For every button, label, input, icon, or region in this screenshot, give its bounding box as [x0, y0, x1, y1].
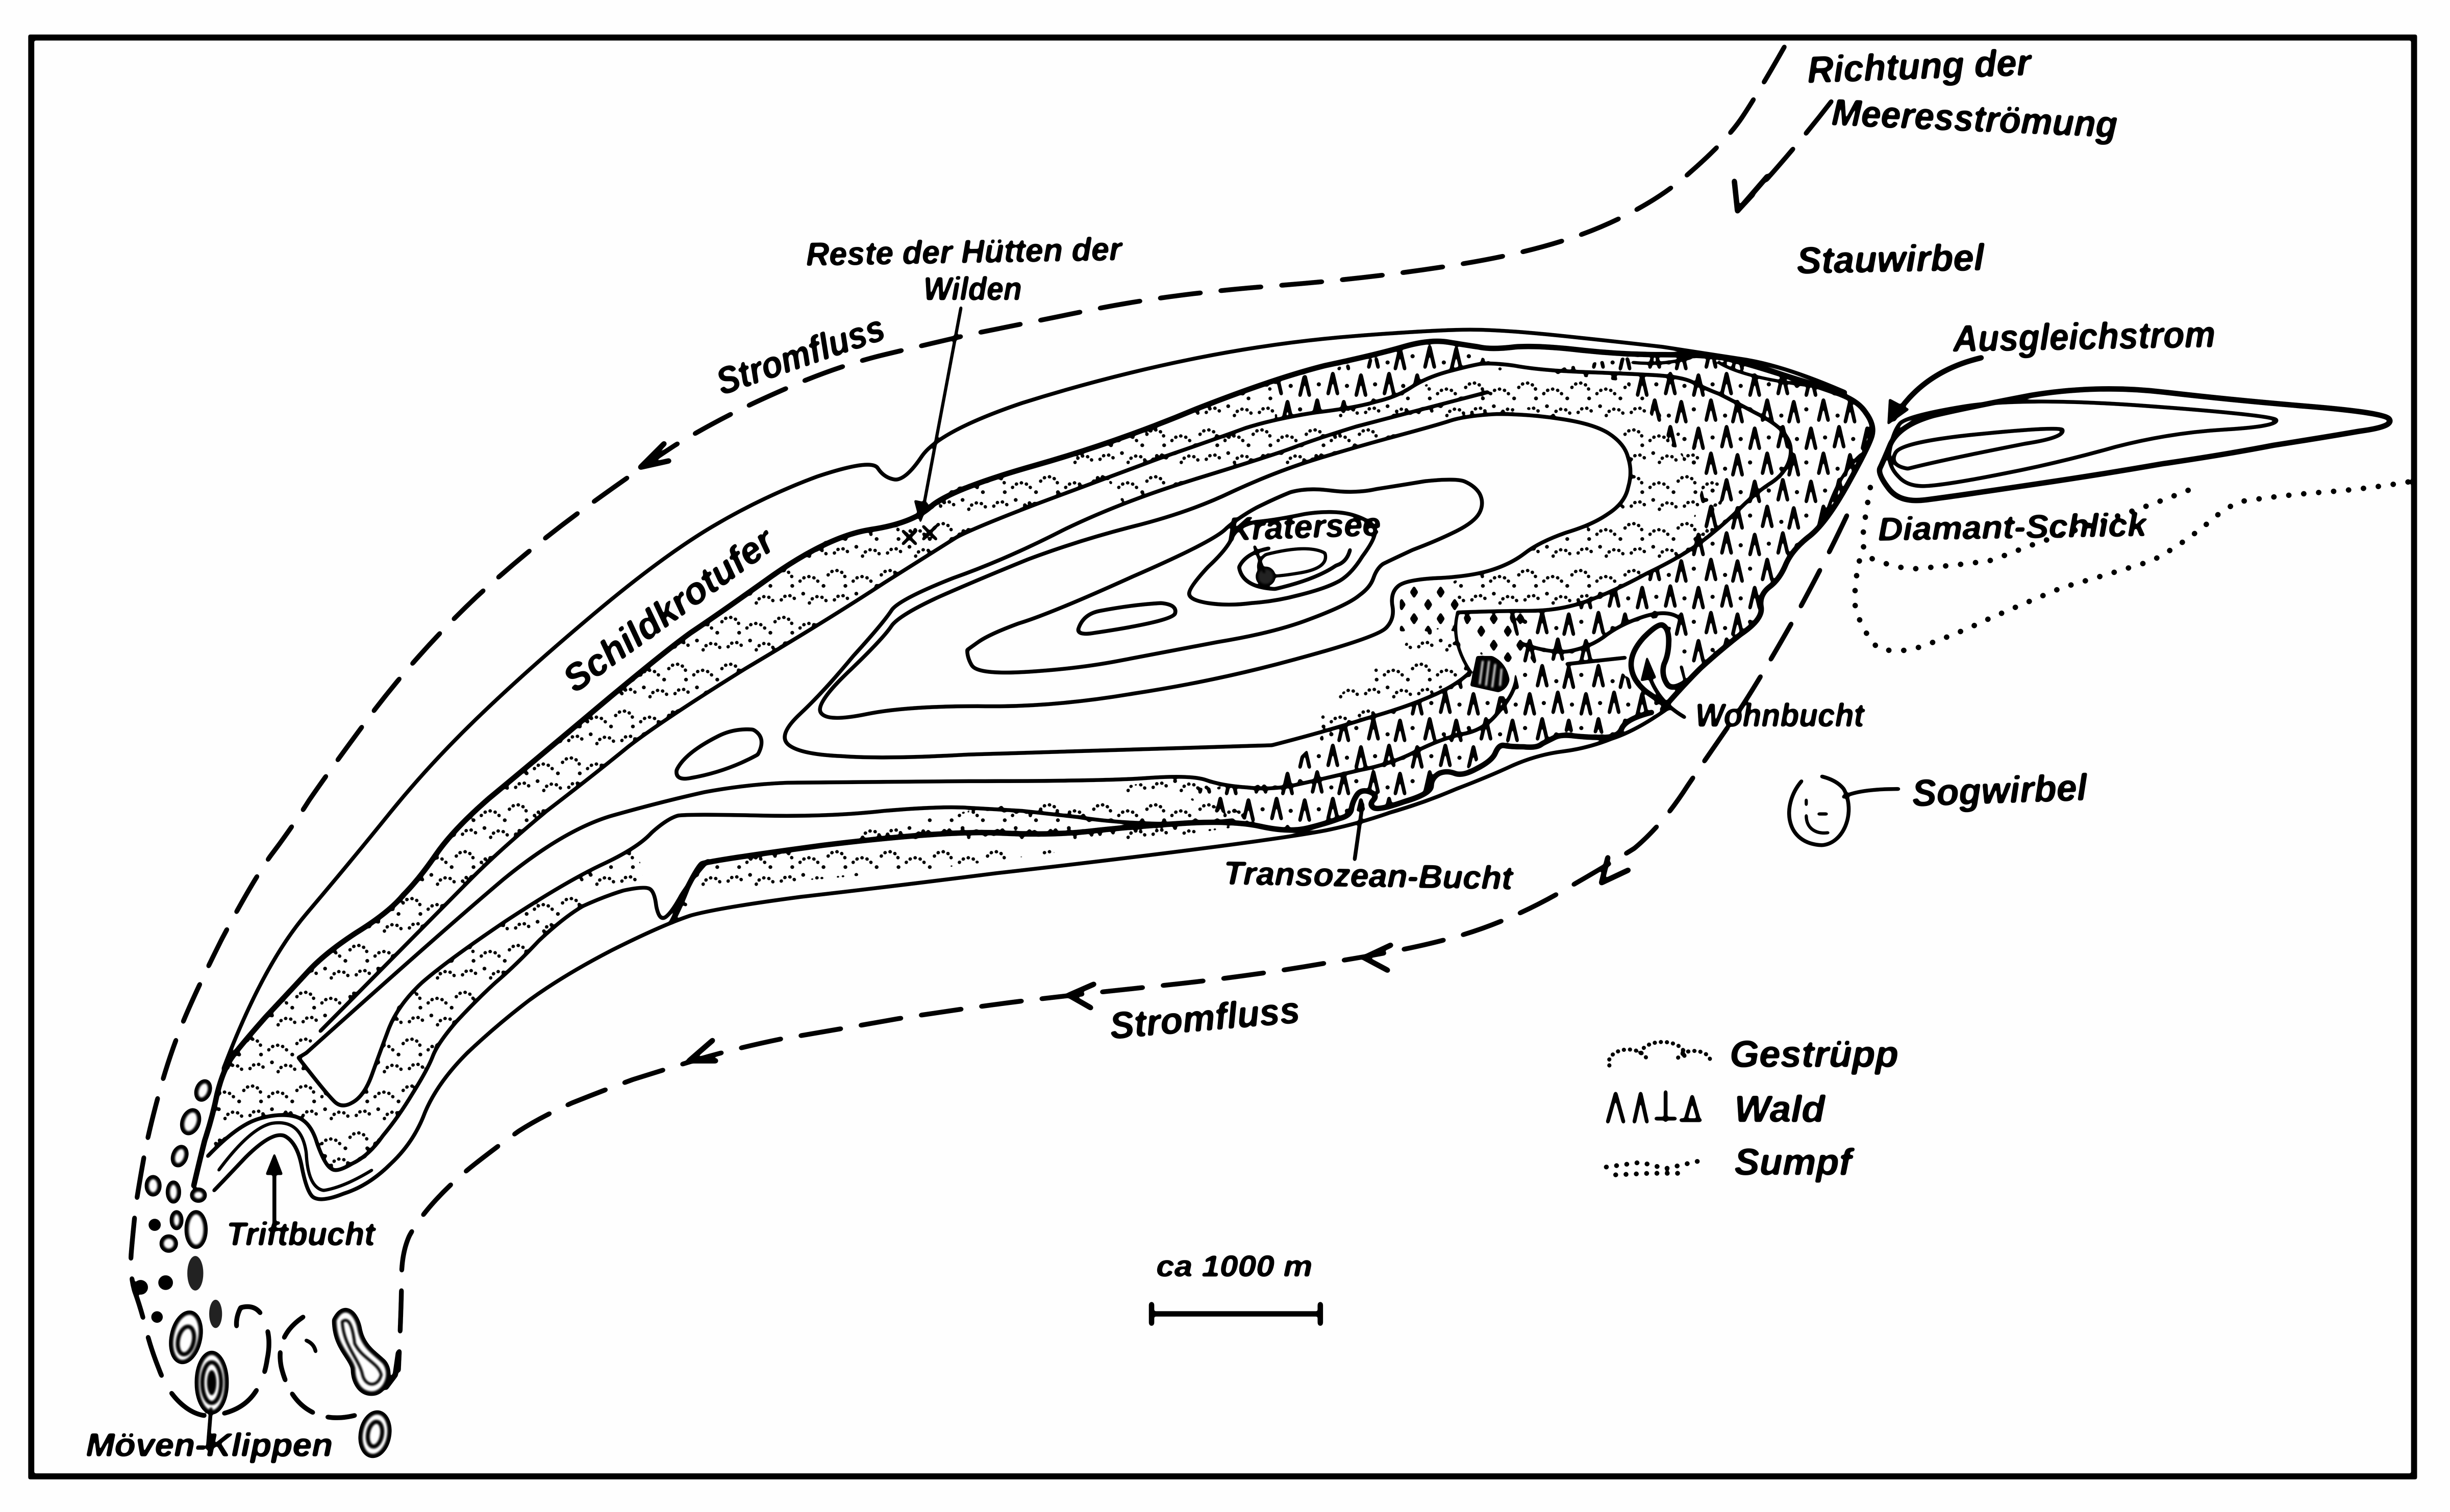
hut — [1470, 656, 1509, 692]
upper dotted line — [1862, 488, 2195, 569]
Triftbucht arrow — [274, 1169, 275, 1226]
panel: legend — [1606, 1033, 1898, 1183]
swamp area south — [1462, 614, 1539, 672]
label: Möven-Klippen: Möven-Klippen — [86, 1426, 333, 1463]
sandbank middle contour — [1889, 401, 2277, 486]
scrub: south-east slope — [1312, 625, 1470, 734]
inner eddy mark — [306, 1341, 316, 1351]
rock 11 — [188, 1256, 203, 1291]
legend icon: Wald — [1608, 1092, 1700, 1122]
strip boundary and forest line — [320, 364, 1791, 1031]
thick coast north and east — [194, 341, 1872, 1186]
panel: scale — [1152, 1250, 1320, 1323]
Reste pointer — [922, 308, 961, 516]
Möven rock south — [357, 1410, 393, 1458]
label: Richtung der: Richtung der — [1807, 41, 2033, 91]
legend label: Gestrüpp: Gestrüpp — [1730, 1033, 1898, 1075]
rock 8 — [172, 1213, 181, 1228]
scrub: north slope band — [1275, 366, 1562, 472]
panel: reefs — [134, 1079, 393, 1458]
rock 15 — [209, 1300, 222, 1328]
panel: streams — [131, 47, 1981, 1418]
panel: island textures — [208, 342, 1872, 1173]
lowland boundary lower — [298, 808, 1233, 1105]
Wohnbucht inlet — [1631, 625, 1684, 708]
plateau oval — [1078, 603, 1176, 634]
rock 9 — [162, 1237, 176, 1251]
contour J — [967, 480, 1482, 672]
lower dotted line — [1855, 481, 2412, 651]
legend label: Wald: Wald — [1734, 1088, 1826, 1130]
lowland boundary upper — [306, 683, 1516, 1053]
panel: island outline and contours — [194, 330, 1872, 1199]
swamp area north — [1400, 581, 1461, 631]
Möven pointer — [208, 1409, 211, 1448]
sandbank inner contour — [1894, 429, 2063, 469]
rock 7 — [149, 1219, 161, 1231]
scale bar — [1152, 1304, 1320, 1323]
north stream dashed — [131, 47, 1784, 1416]
stream arrow east — [1602, 858, 1628, 883]
forest boundary south — [1272, 672, 1470, 745]
eddy centre — [1806, 800, 1827, 814]
Triftbucht arrow head — [266, 1153, 283, 1175]
bay shore — [219, 1123, 372, 1191]
stream arrow south 1 — [1364, 945, 1391, 970]
label: Reste der Hütten der: Reste der Hütten der — [806, 231, 1123, 273]
label: Stromfluss north: Stromfluss — [711, 306, 890, 403]
second eddy dashed — [280, 1317, 355, 1418]
rock 14 — [152, 1312, 163, 1323]
Möven rock central — [197, 1353, 227, 1413]
label: Diamant-Schlick: Diamant-Schlick — [1878, 506, 2148, 548]
label: Kratersee: Kratersee — [1227, 506, 1382, 548]
legend label: Sumpf: Sumpf — [1734, 1141, 1855, 1183]
inner east shore line — [1825, 455, 1861, 519]
current arrow head — [1734, 177, 1767, 211]
label: Stromfluss south: Stromfluss — [1108, 988, 1302, 1047]
label: Ausgleichstrom: Ausgleichstrom — [1952, 313, 2216, 360]
scrub: south shore — [681, 775, 1250, 909]
lagoon line north-east — [1633, 358, 1812, 386]
inner eddy arc — [1806, 816, 1828, 833]
Sogwirbel symbol — [1789, 776, 1898, 845]
contour ring F — [820, 414, 1631, 718]
Wohnbucht arrow head — [1641, 656, 1656, 681]
rock 10 — [187, 1213, 206, 1247]
contour K — [1189, 512, 1375, 604]
rock 13 — [134, 1280, 148, 1295]
label: Sogwirbel: Sogwirbel — [1911, 766, 2088, 814]
label: Wilden: Wilden — [923, 270, 1022, 307]
western oval — [677, 729, 762, 779]
panel: Schlick dotted outline — [1855, 481, 2412, 651]
forest: north strip — [1275, 342, 1491, 419]
scrub: ring around the uplands — [1453, 370, 1723, 613]
crater lake — [1259, 549, 1326, 576]
panel: pointers — [208, 308, 1684, 1448]
label: Triftbucht: Triftbucht — [227, 1216, 377, 1252]
rock 6 — [192, 1190, 205, 1201]
settlement crosses — [903, 526, 936, 544]
current direction dashed — [1741, 102, 1831, 208]
label: Meeresströmung: Meeresströmung — [1831, 91, 2118, 145]
Ausgleichstrom arrow — [1894, 358, 1981, 419]
inner south shore with Transozean inlet — [672, 713, 1652, 922]
contour ring G — [785, 392, 1488, 758]
scale label: ca 1000 m — [1156, 1250, 1312, 1283]
rock 4 — [147, 1177, 159, 1194]
Transozean pointer — [1355, 804, 1362, 859]
south-west coast double line — [208, 861, 708, 1170]
stream arrow south 3 — [689, 1041, 716, 1061]
Ausgleichstrom arrow head — [1888, 398, 1909, 425]
rock 12 — [159, 1275, 173, 1290]
crater pointer — [1255, 547, 1264, 572]
outer eddy arc — [1789, 776, 1848, 845]
rock 2 — [179, 1108, 202, 1136]
forest sub-line near Wohnbucht — [1522, 613, 1678, 664]
forest: eastern headland — [1508, 358, 1872, 683]
stream arrow south 2 — [1069, 984, 1094, 1007]
swamp edge thin line — [1456, 613, 1470, 672]
contour L — [1239, 548, 1350, 589]
label: Schildkrotufer: Schildkrotufer — [555, 518, 784, 700]
scrub: north-west shore and south-west lobe — [208, 378, 1275, 1173]
forest: south strip — [1183, 642, 1662, 829]
sandbank outer outline — [1880, 389, 2390, 500]
scrub: north-west slope band — [1106, 419, 1275, 501]
label: Transozean-Bucht: Transozean-Bucht — [1223, 854, 1514, 896]
Wohnbucht arrow — [1647, 664, 1684, 717]
Sogwirbel leader — [1844, 789, 1898, 797]
rock 5 — [168, 1182, 179, 1201]
legend icon: Gestrüpp — [1609, 1042, 1710, 1066]
outer reef line north — [223, 330, 1845, 1069]
south reef line — [214, 708, 1669, 1199]
crater vent — [1257, 568, 1274, 585]
Reste pointer head — [914, 500, 928, 523]
small rocks — [194, 1079, 212, 1101]
label: Stauwirbel: Stauwirbel — [1796, 236, 1985, 282]
south stream dashed — [398, 516, 1847, 1370]
legend icon: Sumpf — [1606, 1161, 1700, 1175]
Möven rock west — [167, 1310, 205, 1365]
panel: sandbank — [1880, 389, 2390, 500]
stream arrow north-west — [641, 444, 669, 467]
rock 3 — [170, 1145, 189, 1167]
peanut rock — [334, 1310, 388, 1394]
stream tail into rock — [386, 1353, 398, 1388]
label: Wohnbucht: Wohnbucht — [1695, 697, 1865, 734]
